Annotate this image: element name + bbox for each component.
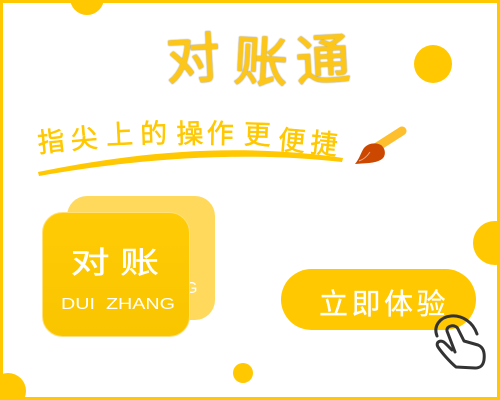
- subtitle: 的: [140, 119, 168, 149]
- subtitle underline swoosh: [38, 150, 343, 176]
- icon: pointing hand: [436, 316, 484, 368]
- subtitle: 捷: [309, 128, 339, 160]
- subtitle: 更: [243, 120, 271, 150]
- title: 通: [295, 30, 352, 92]
- front card: DUI ZHANG: [61, 296, 175, 313]
- subtitle: 操: [176, 119, 204, 149]
- front card: [42, 212, 190, 336]
- subtitle: 指: [36, 126, 66, 158]
- icon: paint brush: [355, 131, 402, 164]
- button: [281, 269, 476, 330]
- back card: G: [185, 280, 197, 297]
- subtitle: 便: [277, 125, 307, 157]
- back card: [67, 196, 215, 320]
- title: 对: [165, 29, 222, 91]
- title: 账: [232, 32, 289, 94]
- button: 立即体验: [319, 288, 449, 321]
- front card: 对账: [71, 247, 169, 280]
- title: [165, 29, 352, 94]
- subtitle: 尖: [69, 123, 99, 155]
- subtitle: 作: [206, 119, 234, 149]
- subtitle: 上: [105, 119, 134, 151]
- subtitle: [36, 119, 339, 160]
